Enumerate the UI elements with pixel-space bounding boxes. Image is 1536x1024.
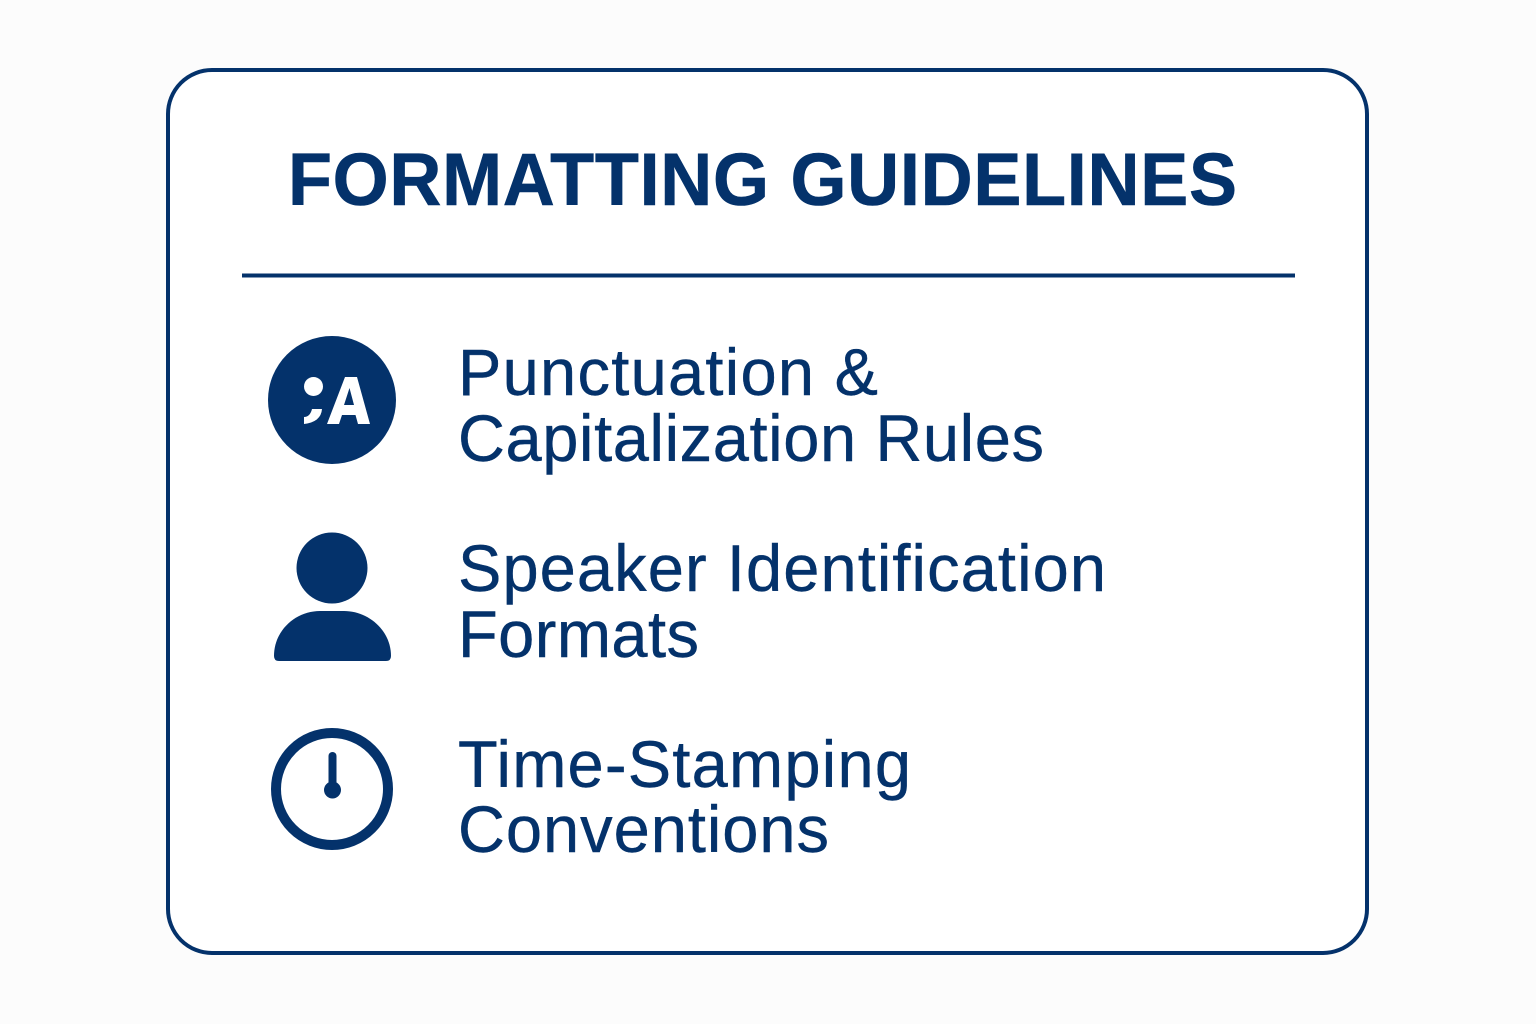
title: FORMATTING GUIDELINES: [288, 139, 1237, 221]
text: time-stamping: [458, 727, 911, 866]
icon: person: [274, 532, 391, 661]
text: time-stamping: Time-Stamping: [458, 727, 911, 801]
text: speaker identification: Speaker Identification: [458, 531, 1106, 605]
text: speaker identification: [458, 531, 1106, 671]
text: punctuation and capitalization: Punctuation &: [458, 335, 878, 409]
text: speaker identification: Formats: [458, 597, 699, 671]
icon: clock: [276, 733, 388, 845]
panel: card: [168, 70, 1367, 953]
text: punctuation and capitalization: Capitalization Rules: [458, 401, 1044, 475]
icon: punctuation: [268, 336, 396, 464]
text: punctuation and capitalization: [458, 335, 1044, 475]
text: time-stamping: Conventions: [458, 792, 829, 866]
